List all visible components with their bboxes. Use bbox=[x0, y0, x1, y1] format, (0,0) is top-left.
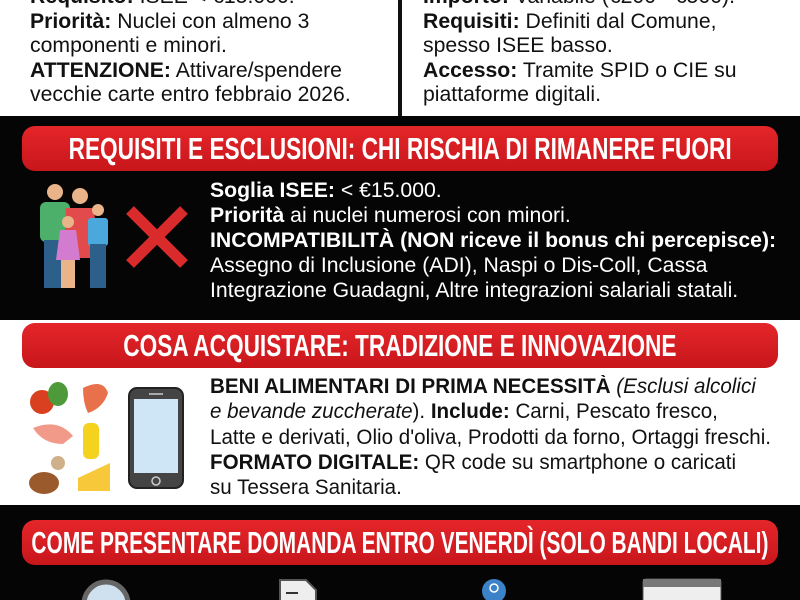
text block: acquisti bbox=[210, 375, 771, 499]
text block: left column: componenti e minori. bbox=[30, 34, 227, 57]
heading: cosa acquistare: COSA ACQUISTARE: TRADIZIONE E INNOVAZIONE bbox=[123, 328, 677, 363]
text block: left column: ATTENZIONE: Attivare/spendere bbox=[30, 58, 342, 82]
icon: food bbox=[29, 382, 110, 494]
text block: acquisti: Latte e derivati, Olio d'oliva, Prodotti da forno, Ortaggi freschi. bbox=[210, 426, 771, 449]
text block: left column: vecchie carte entro febbraio 2026. bbox=[30, 83, 351, 106]
text block: right column: Requisiti: Definiti dal Comune, bbox=[423, 10, 717, 32]
text block: requisiti: Soglia ISEE: < €15.000. bbox=[210, 179, 442, 202]
icon: document bbox=[279, 579, 317, 600]
text block: acquisti: BENI ALIMENTARI DI PRIMA NECESSITÀ (Esclusi alcolici bbox=[210, 375, 756, 398]
text block: requisiti: Priorità ai nuclei numerosi con minori. bbox=[210, 204, 571, 227]
text block: right column bbox=[423, 0, 737, 106]
icon: magnifier bbox=[82, 580, 130, 600]
text block: requisiti: Assegno di Inclusione (ADI), Naspi o Dis-Coll, Cassa bbox=[210, 254, 707, 277]
text block: requisiti bbox=[210, 179, 776, 302]
divider bbox=[398, 0, 402, 116]
text block: acquisti: e bevande zuccherate). Include: Carni, Pescato fresco, bbox=[210, 400, 718, 423]
panel: top white section bbox=[0, 0, 800, 116]
text block: left column bbox=[30, 0, 351, 106]
text block: requisiti: INCOMPATIBILITÀ (NON riceve il bonus chi percepisce): bbox=[210, 229, 776, 252]
heading: come presentare: COME PRESENTARE DOMANDA ENTRO VENERDÌ (SOLO BANDI LOCALI) bbox=[31, 525, 769, 560]
heading: requisiti: REQUISITI E ESCLUSIONI: CHI RISCHIA DI RIMANERE FUORI bbox=[68, 131, 731, 166]
heading: cosa acquistare bbox=[22, 323, 778, 368]
panel: come presentare domanda bbox=[0, 505, 800, 600]
text block: right column: piattaforme digitali. bbox=[423, 83, 601, 106]
icon: browser bbox=[642, 578, 722, 600]
text block: right column: spesso ISEE basso. bbox=[423, 34, 613, 57]
text block: acquisti: FORMATO DIGITALE: QR code su smartphone o caricati bbox=[210, 451, 736, 474]
heading: requisiti bbox=[22, 126, 778, 171]
icon: smartphone bbox=[128, 387, 184, 489]
text block: left column: Priorità: Nuclei con almeno 3 bbox=[30, 10, 309, 32]
panel: cosa acquistare bbox=[0, 320, 800, 505]
icon: red X bbox=[126, 206, 188, 268]
text block: right column: Accesso: Tramite SPID o CIE su bbox=[423, 58, 737, 82]
icon: family bbox=[40, 184, 108, 288]
text block: acquisti: su Tessera Sanitaria. bbox=[210, 476, 402, 499]
icon: user bbox=[482, 579, 506, 600]
panel: requisiti e esclusioni bbox=[0, 116, 800, 320]
text block: requisiti: Integrazione Guadagni, Altre integrazioni salariali statali. bbox=[210, 279, 738, 302]
